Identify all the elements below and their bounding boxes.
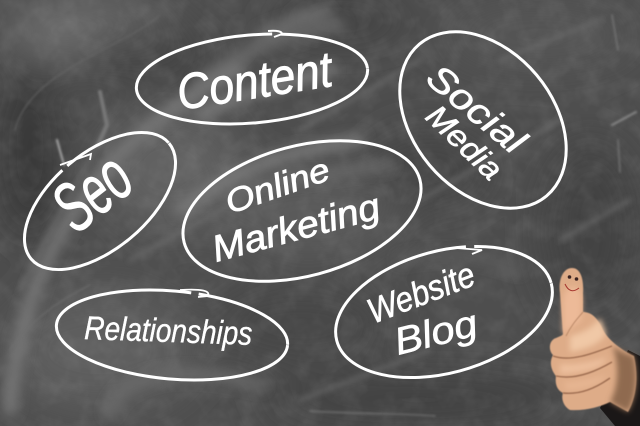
label: Media: Media — [419, 98, 510, 187]
label: Online: Online — [220, 150, 334, 221]
label: Social: Social — [419, 56, 535, 162]
bubble: Online Marketing — [167, 117, 437, 305]
label: Marketing: Marketing — [207, 185, 385, 270]
finger creases — [553, 346, 612, 393]
label: Content: Content — [173, 41, 338, 121]
bubble: Seo — [0, 106, 200, 296]
smiley — [568, 275, 571, 279]
hand shading — [610, 345, 636, 412]
bubble: Relationships — [53, 281, 291, 389]
label: Seo: Seo — [37, 137, 147, 247]
icon: thumbs up hand with smiley — [550, 268, 640, 426]
label: Blog: Blog — [390, 303, 482, 364]
bubble: Social Media — [366, 0, 600, 241]
label: Website: Website — [362, 255, 480, 331]
bubble: Content — [133, 25, 371, 133]
bubble: Website Blog — [321, 224, 567, 400]
hand — [550, 268, 636, 412]
label: Relationships: Relationships — [84, 309, 253, 352]
sleeve — [600, 350, 640, 426]
